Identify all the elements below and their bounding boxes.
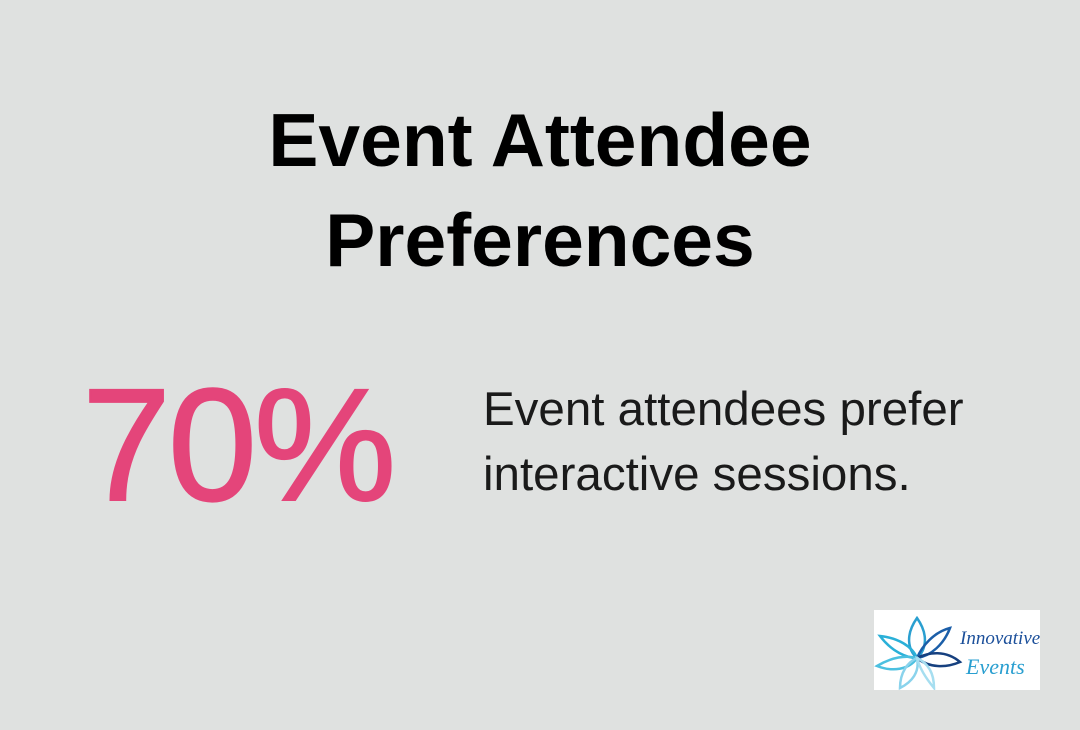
stat description: interactive sessions. [483, 448, 911, 501]
stat description [483, 383, 964, 501]
stat description: Event attendees prefer [483, 383, 964, 436]
logo [874, 610, 1040, 690]
icon: flower [877, 618, 960, 688]
title: Event Attendee [268, 98, 812, 182]
title: Preferences [325, 198, 755, 282]
logo text: Innovative [959, 628, 1040, 649]
big stat: 70% [82, 355, 393, 534]
title [268, 98, 812, 282]
logo: Events [965, 654, 1025, 679]
